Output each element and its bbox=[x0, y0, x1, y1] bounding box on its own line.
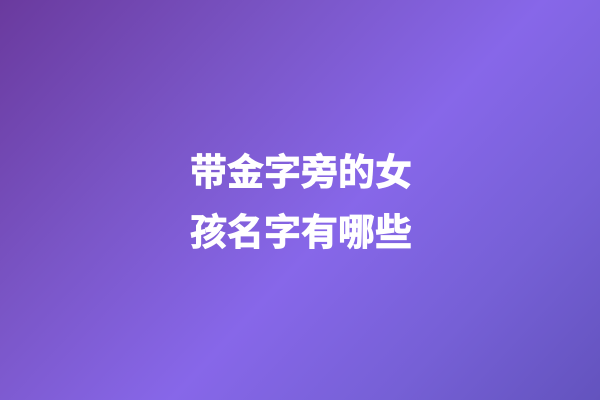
title line 2: 孩名字有哪些 bbox=[190, 212, 412, 253]
title bbox=[190, 152, 412, 253]
title line 1: 带金字旁的女 bbox=[190, 152, 412, 193]
